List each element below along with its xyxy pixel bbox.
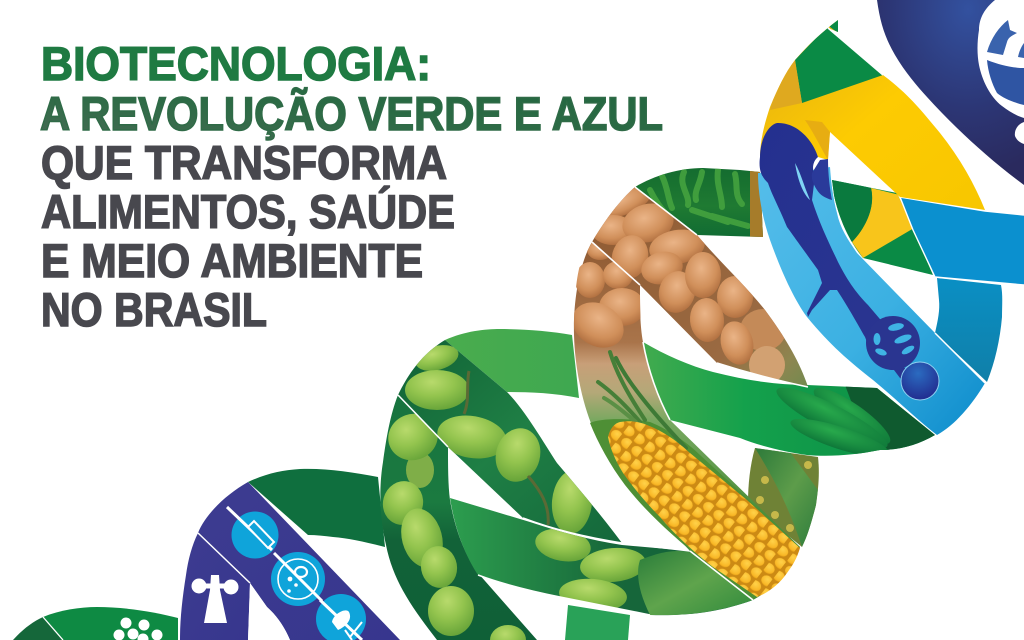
corn cob (590, 352, 800, 600)
title line: alimentos, saúde: ALIMENTOS, SAÚDE (41, 185, 455, 238)
icon: cell circle (271, 552, 325, 606)
panel: corn lower right strand (748, 448, 819, 547)
title line: a revolução verde e azul: A REVOLUÇÃO VERDE E AZUL (40, 87, 663, 140)
panel: globe emblem top right (877, 0, 1024, 185)
panel: peanut upper band (590, 182, 810, 390)
title (40, 37, 663, 336)
husk leaf (638, 551, 753, 615)
white separators soy (398, 395, 690, 615)
gold strip (750, 171, 763, 237)
panel: teal downward strand (935, 278, 1002, 382)
kernels (608, 421, 800, 597)
panel: bottom-left green band (13, 607, 178, 640)
panel: light green bar (445, 329, 579, 398)
white separators peanuts (592, 187, 808, 600)
blue molecule (760, 123, 939, 400)
icon: microscope circle (316, 594, 366, 640)
icon: white dots (114, 618, 162, 640)
husk (590, 419, 800, 600)
panel: brazil flag strand (755, 15, 990, 215)
panel: corn strand with tan gradient (574, 242, 800, 600)
panel: soy left strand (375, 390, 545, 640)
soybeans left (378, 407, 526, 640)
panel: blue molecule strand (758, 123, 985, 435)
title line: que transforma: QUE TRANSFORMA (41, 136, 447, 189)
panel: soy middle band (445, 495, 755, 620)
peanuts lower (574, 242, 640, 348)
panel: dark green bar to soy strand (248, 469, 385, 547)
title line: biotecnologia: BIOTECNOLOGIA: (41, 37, 431, 90)
cucumbers (776, 388, 890, 454)
icon: balance symbol (192, 575, 238, 623)
panel: blue horizontal bar (900, 197, 1024, 285)
panel: cucumber green band (644, 342, 935, 456)
panel: soy upper strand (398, 340, 622, 542)
panel: lower green stub (565, 605, 630, 640)
panel: flag middle segment (832, 180, 933, 275)
soybeans lower (535, 529, 644, 608)
peanuts upper (591, 182, 786, 384)
title line: no brasil: NO BRASIL (41, 283, 267, 336)
soybeans upper (405, 341, 595, 536)
grass leaves (650, 170, 748, 226)
icon: syringe circle (227, 507, 278, 558)
panel: purple health strand (180, 482, 400, 640)
panel: grass strand (635, 168, 763, 237)
leaves (598, 352, 686, 448)
title line: e meio ambiente: E MEIO AMBIENTE (41, 234, 423, 287)
